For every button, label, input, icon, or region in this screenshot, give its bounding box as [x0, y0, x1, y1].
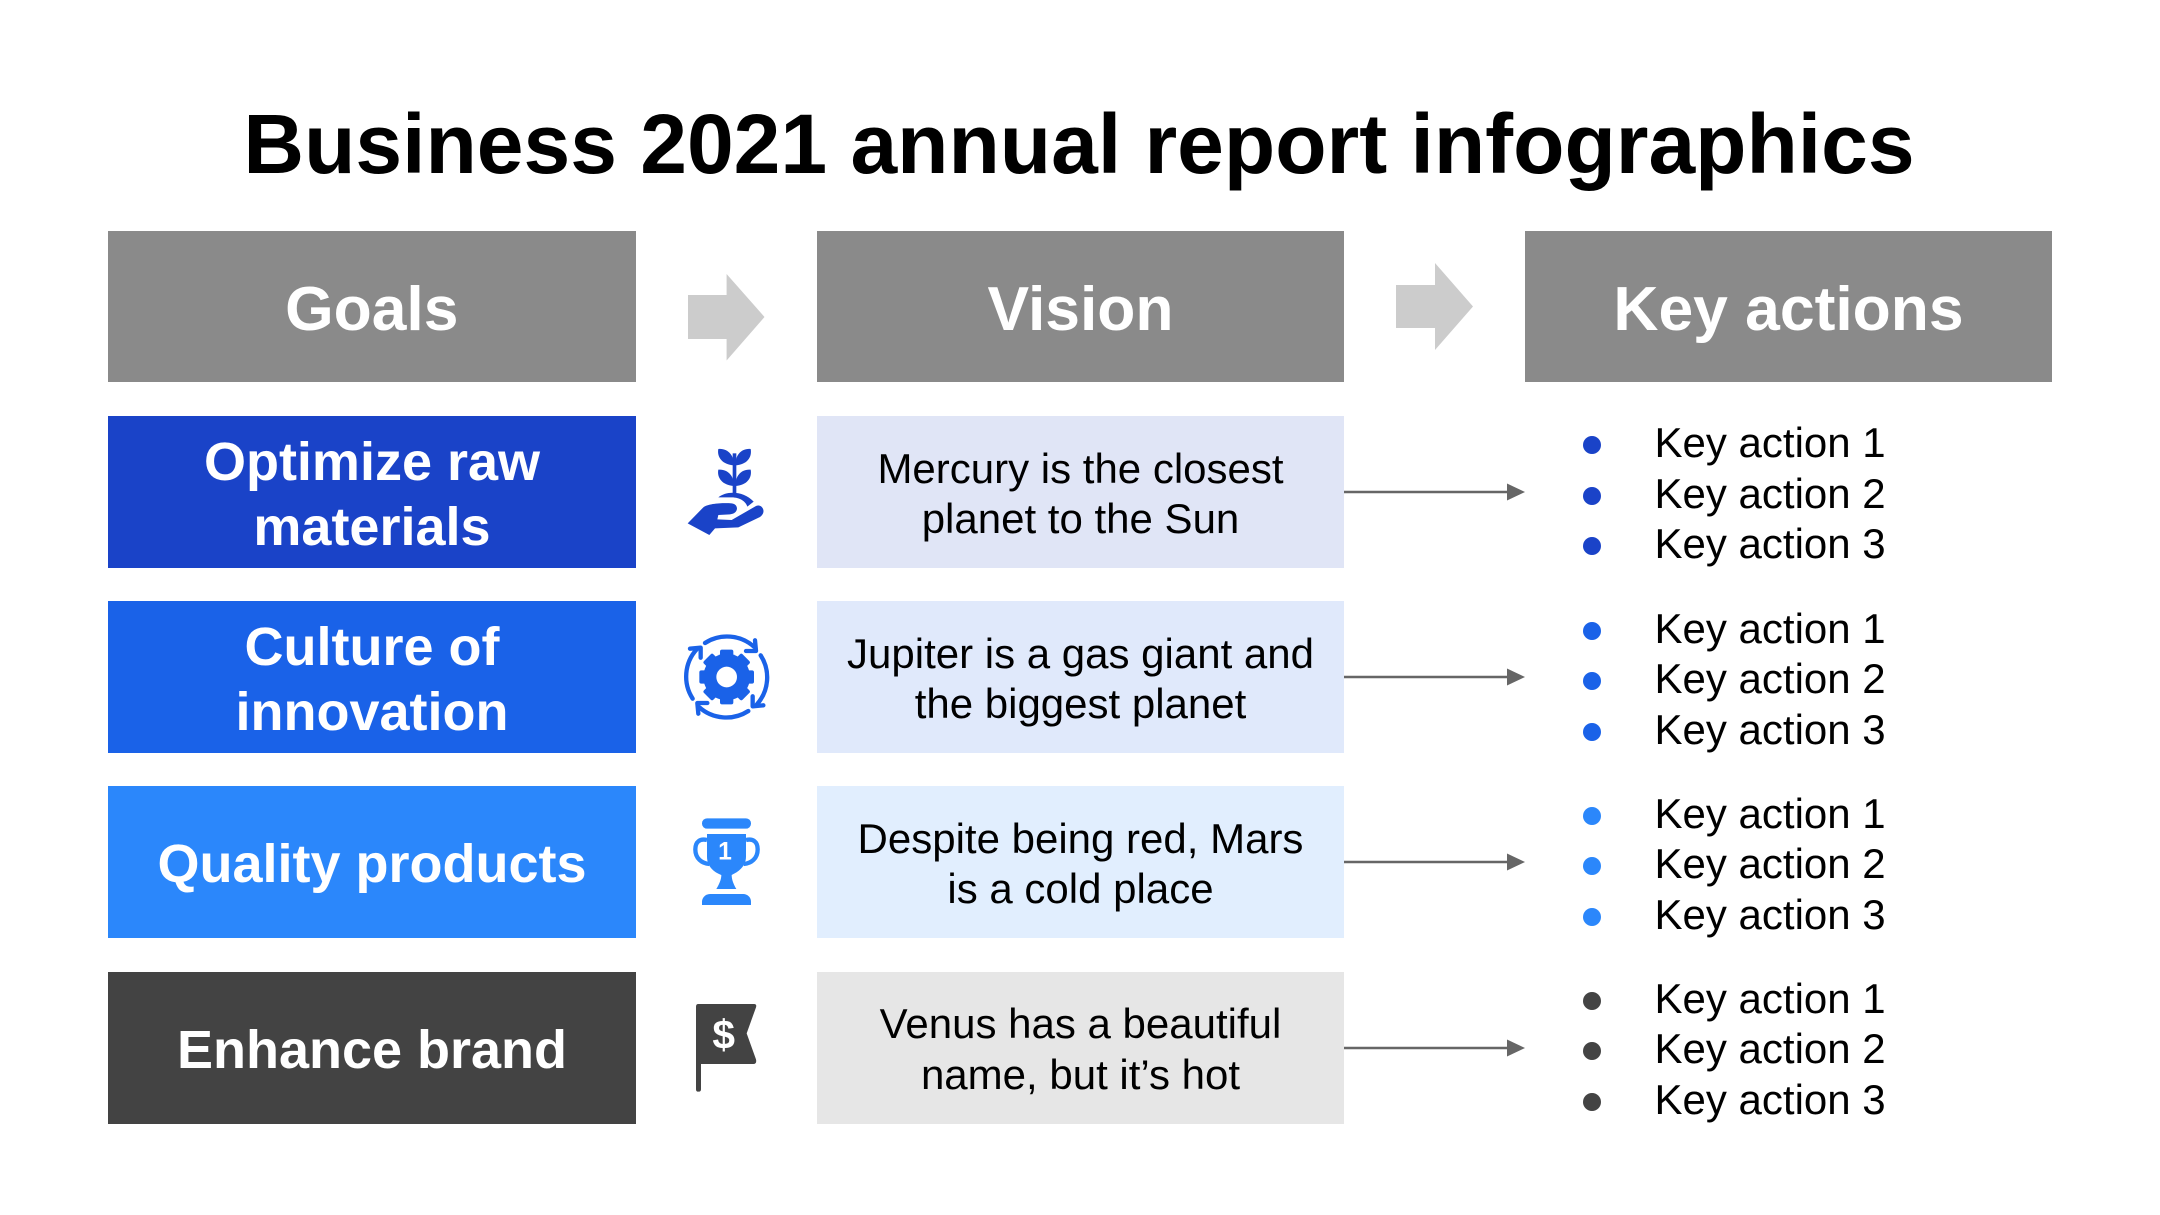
arrow: vision to key actions: [1396, 263, 1473, 350]
vision text: Mercury: Mercury is the closest: [877, 444, 1284, 492]
vision text: Mars: is a cold place: [947, 865, 1214, 912]
goal: Optimize raw materials: [108, 416, 636, 568]
vision text: Mars: Despite being red, Mars: [858, 814, 1303, 862]
heading: Key actions: [1525, 231, 2052, 382]
vision text: Mars: [817, 786, 1344, 938]
connector arrow: [1344, 1040, 1525, 1056]
goal: Enhance brand: Enhance brand: [177, 1020, 567, 1080]
key actions list: [1583, 790, 1886, 938]
vision text: Venus: Venus has a beautiful: [880, 1000, 1281, 1047]
icon: flag with dollar sign: [696, 1004, 756, 1092]
goal: Quality products: Quality products: [157, 834, 587, 894]
key actions list: Key action 2: [1654, 470, 1886, 516]
key actions list: [1583, 419, 1886, 567]
row: Culture of innovation: [108, 601, 1886, 753]
key actions list: Key action 2: [1654, 840, 1886, 887]
goal: Optimize raw materials: materials: [253, 496, 491, 556]
goal: Culture of innovation: innovation: [236, 682, 508, 742]
heading: Goals: Goals: [285, 275, 458, 344]
key actions list: Key action 3: [1654, 890, 1886, 938]
key actions list: Key action 1: [1654, 419, 1886, 466]
connector arrow: [1344, 854, 1525, 870]
vision text: Venus: name, but it’s hot: [921, 1050, 1240, 1098]
icon: trophy: [693, 818, 760, 905]
icon: hand holding plant: [688, 448, 764, 535]
key actions list: [1583, 974, 1886, 1122]
goal: Optimize raw materials: Optimize raw: [204, 432, 540, 492]
arrow: goals to vision: [688, 274, 764, 360]
vision text: Mercury: [817, 416, 1344, 568]
key actions list: Key action 3: [1654, 706, 1886, 752]
icon: trophy: 1: [718, 838, 732, 865]
goal: Culture of innovation: Culture of: [244, 616, 499, 676]
title: Business 2021 annual report infographics: [243, 97, 1915, 191]
key actions list: Key action 1: [1654, 790, 1886, 836]
vision text: Jupiter: [817, 601, 1344, 753]
goal: Enhance brand: [108, 972, 636, 1124]
vision text: Mercury: planet to the Sun: [922, 495, 1239, 542]
key actions list: Key action 3: [1654, 1076, 1886, 1122]
vision text: Jupiter: Jupiter is a gas giant and: [847, 630, 1314, 676]
key actions list: Key action 1: [1654, 974, 1886, 1022]
goal: Culture of innovation: [108, 601, 636, 753]
row: Optimize raw materials: [108, 416, 1886, 568]
icon: flag with dollar sign: $: [712, 1012, 735, 1058]
key actions list: Key action 2: [1654, 655, 1886, 702]
key actions list: Key action 1: [1654, 604, 1886, 652]
row: Quality products: [108, 786, 1886, 938]
key actions list: Key action 2: [1654, 1025, 1886, 1072]
key actions list: Key action 3: [1654, 520, 1886, 567]
goal: Quality products: [108, 786, 636, 938]
connector arrow: [1344, 668, 1525, 686]
vision text: Venus: [817, 972, 1344, 1124]
icon: gear with circular arrows: [684, 634, 770, 720]
connector arrow: [1344, 484, 1525, 500]
row: Enhance brand: [108, 972, 1886, 1124]
heading: Vision: Vision: [987, 275, 1174, 344]
heading: Goals: [108, 231, 636, 382]
heading: Vision: [817, 231, 1344, 382]
key actions list: [1583, 604, 1886, 752]
vision text: Jupiter: the biggest planet: [915, 680, 1246, 727]
heading: Key actions: Key actions: [1613, 275, 1964, 344]
